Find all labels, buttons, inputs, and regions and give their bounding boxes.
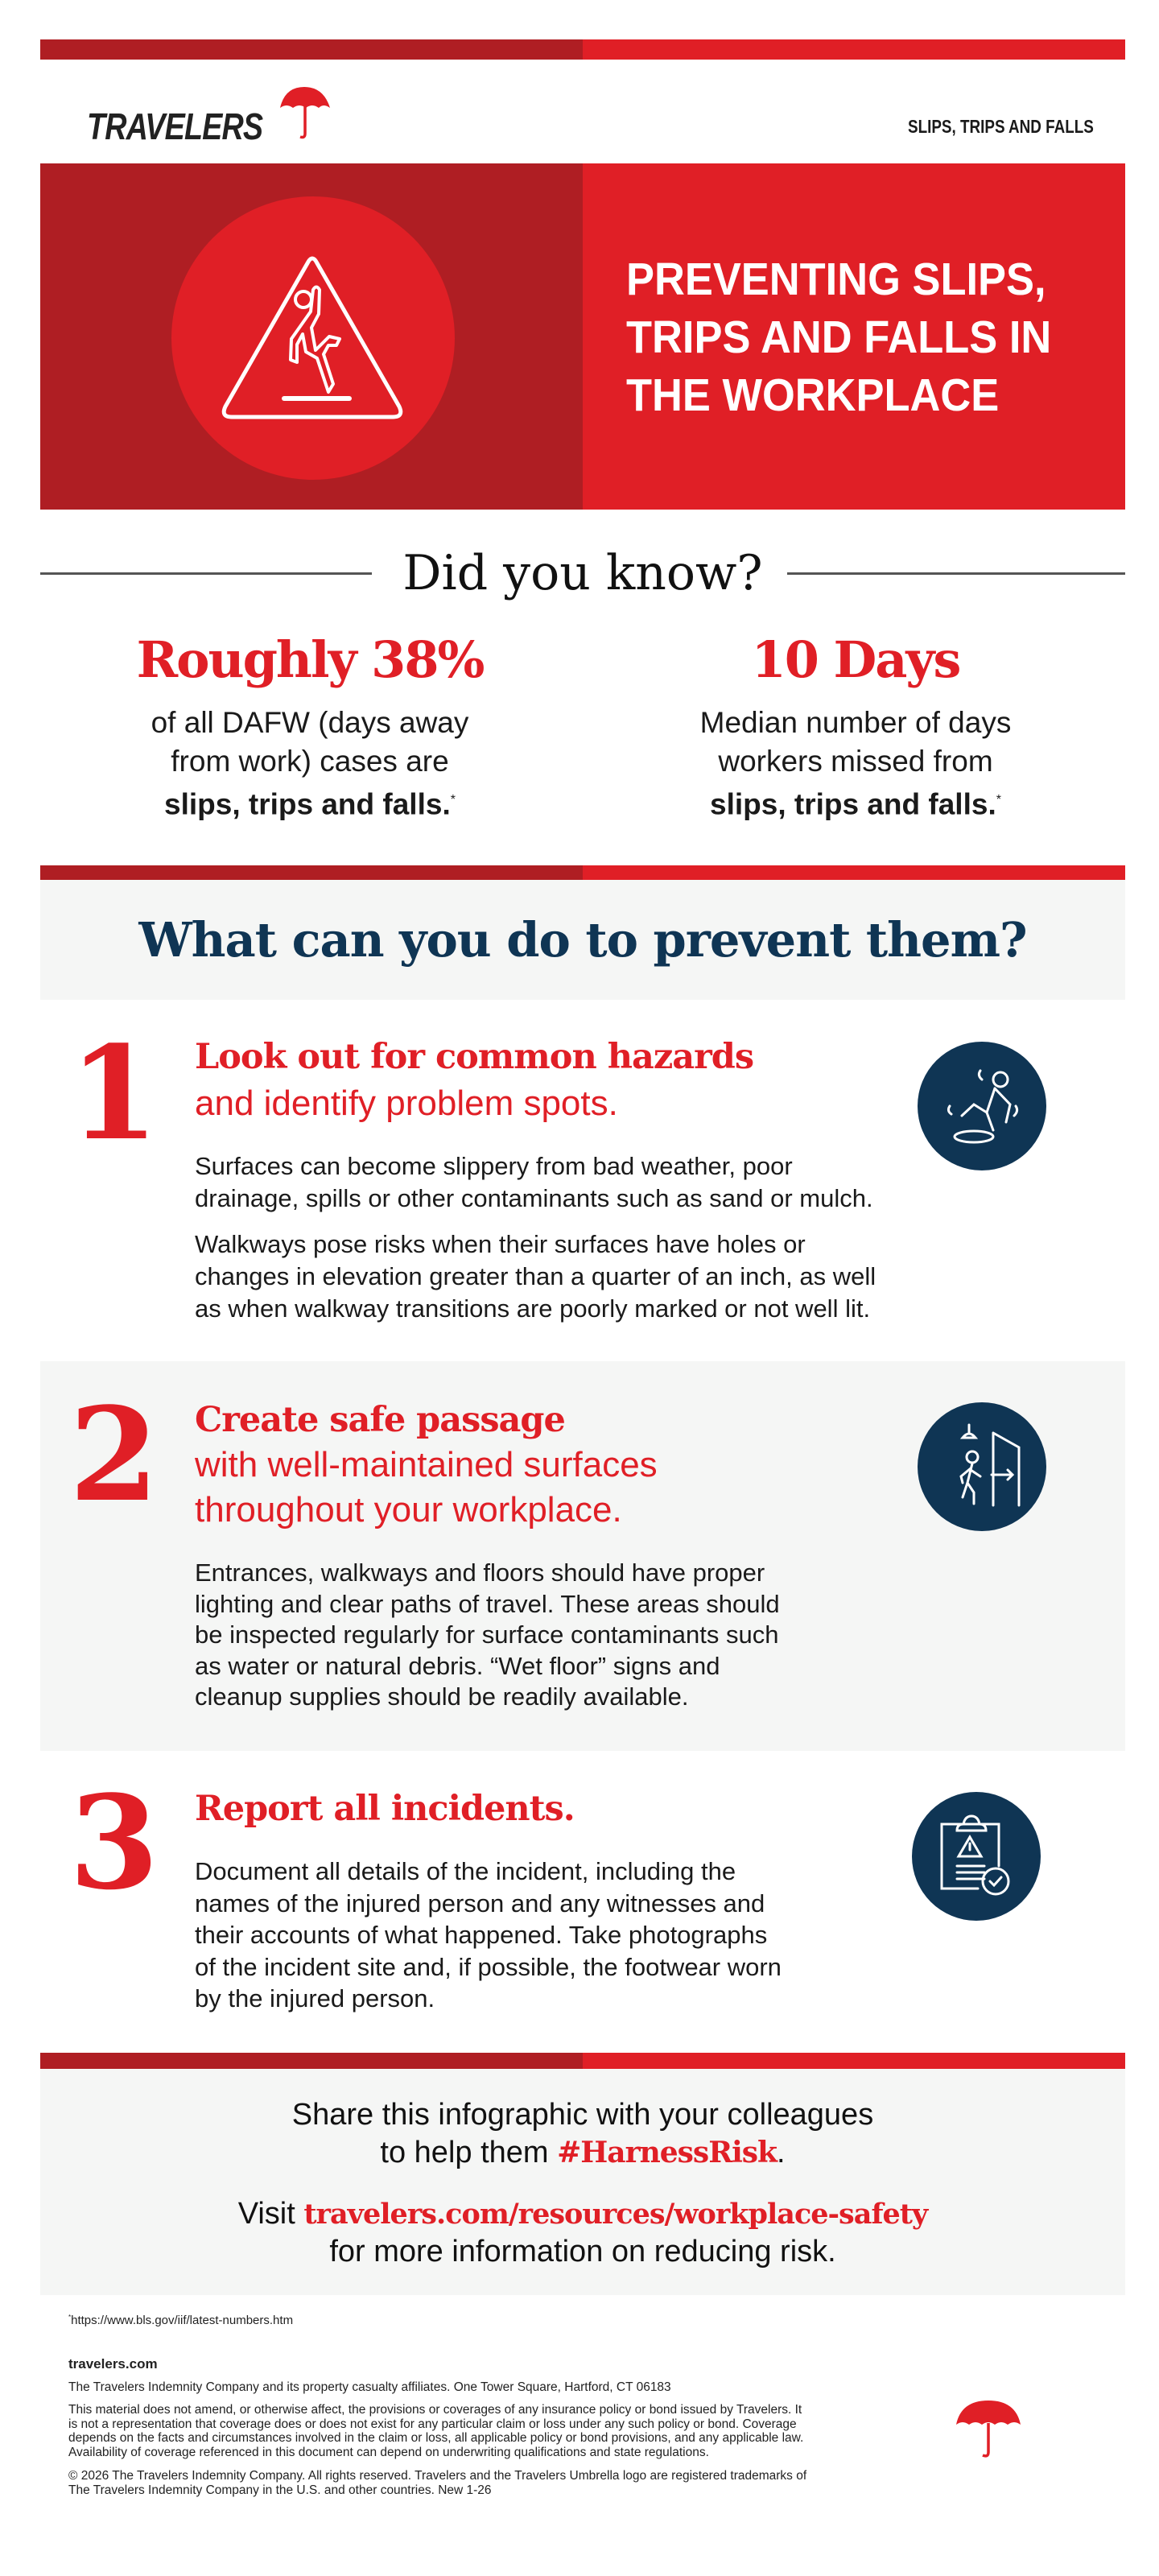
stat: 38%: slips, trips and falls.* bbox=[164, 787, 456, 820]
body 3: by the injured person. bbox=[195, 1984, 435, 2013]
body 2: lighting and clear paths of travel. These areas should bbox=[195, 1589, 780, 1618]
divider bar bbox=[40, 865, 1125, 880]
footer text bbox=[68, 2356, 806, 2497]
stat: 10 days: workers missed from bbox=[718, 745, 993, 778]
footer text: The Travelers Indemnity Company in the U.S. and other countries. New 1-26 bbox=[68, 2483, 492, 2497]
body 3 bbox=[195, 1857, 782, 2013]
body 3: names of the injured person and any witnesses and bbox=[195, 1889, 765, 1918]
heading 1: Look out for common hazards bbox=[195, 1037, 753, 1077]
body 1 bbox=[195, 1152, 876, 1323]
item 2 panel bbox=[40, 1361, 1125, 1751]
heading 2: throughout your workplace. bbox=[195, 1490, 622, 1530]
share callout: Visit travelers.com/resources/workplace-safety bbox=[238, 2197, 927, 2231]
hero title: PREVENTING SLIPS, bbox=[626, 254, 1046, 305]
body 2: cleanup supplies should be readily available. bbox=[195, 1682, 689, 1711]
stat: 10 days bbox=[700, 630, 1011, 820]
number 2: 2 bbox=[69, 1379, 159, 1530]
top color bar bbox=[40, 39, 1125, 60]
section heading: What can you do to prevent them? bbox=[138, 912, 1027, 968]
heading: did you know bbox=[40, 545, 1125, 601]
body 2: be inspected regularly for surface contaminants such bbox=[195, 1620, 778, 1649]
logo: Travelers bbox=[87, 87, 330, 147]
heading 2: with well-maintained surfaces bbox=[195, 1445, 658, 1484]
body 3: their accounts of what happened. Take photographs bbox=[195, 1921, 767, 1949]
hero title bbox=[626, 254, 1051, 421]
body 2: as water or natural debris. “Wet floor” signs and bbox=[195, 1652, 720, 1679]
icon: umbrella logo bbox=[956, 2401, 1021, 2458]
stat: 38%: from work) cases are bbox=[171, 745, 449, 778]
body 2: Entrances, walkways and floors should have proper bbox=[195, 1558, 765, 1587]
body 2 bbox=[195, 1558, 780, 1711]
body 1: changes in elevation greater than a quarter of an inch, as well bbox=[195, 1262, 876, 1290]
logo: Travelers: TRAVELERS bbox=[87, 105, 262, 147]
footer text: © 2026 The Travelers Indemnity Company. All rights reserved. Travelers and the Travelers Umbrella logo are registered trademarks of bbox=[68, 2469, 806, 2483]
stat: 10 days: 10 Days bbox=[752, 630, 959, 689]
footer text: This material does not amend, or otherwise affect, the provisions or coverages of any insurance policy or bond issued by Travelers. It bbox=[68, 2403, 802, 2417]
stat: 10 days: Median number of days bbox=[700, 706, 1011, 739]
footer text: travelers.com bbox=[68, 2356, 158, 2372]
stat: 38%: of all DAFW (days away bbox=[151, 706, 468, 739]
share callout: Share this infographic with your colleagues bbox=[292, 2098, 873, 2132]
body 3: of the incident site and, if possible, the footwear worn bbox=[195, 1953, 782, 1980]
footer text: The Travelers Indemnity Company and its property casualty affiliates. One Tower Square, Hartford, CT 06183 bbox=[68, 2380, 671, 2394]
share callout: to help them #HarnessRisk. bbox=[380, 2136, 786, 2169]
body 3: Document all details of the incident, including the bbox=[195, 1857, 736, 1885]
hero panel bbox=[40, 163, 1125, 510]
number 1: 1 bbox=[69, 1018, 159, 1169]
stat: 38%: Roughly 38% bbox=[137, 630, 483, 689]
share callout bbox=[40, 2069, 1125, 2295]
footnote: *https://www.bls.gov/iif/latest-numbers.htm bbox=[68, 2314, 293, 2327]
stat: 38% bbox=[137, 630, 484, 820]
stat: 10 days: slips, trips and falls.* bbox=[710, 787, 1001, 820]
item 3 bbox=[69, 1767, 1041, 2013]
heading: did you know: Did you know? bbox=[402, 545, 763, 601]
heading 2 bbox=[195, 1400, 658, 1530]
heading 2: Create safe passage bbox=[195, 1400, 565, 1440]
heading 3: Report all incidents. bbox=[195, 1789, 575, 1829]
item 1 bbox=[69, 1018, 1046, 1323]
icon: wet floor warning bbox=[171, 196, 455, 480]
icon: exit door bbox=[918, 1402, 1046, 1531]
icon: slipping person bbox=[918, 1042, 1046, 1170]
number 3: 3 bbox=[69, 1767, 159, 1918]
body 1: as when walkway transitions are poorly marked or not well lit. bbox=[195, 1294, 870, 1323]
footer text: is not a representation that coverage does or does not exist for any particular claim or loss under any such policy or bond. Coverage bbox=[68, 2417, 797, 2431]
footer text: Availability of coverage referenced in this document can depend on underwriting qualifications and state regulations. bbox=[68, 2446, 709, 2458]
heading 1: and identify problem spots. bbox=[195, 1084, 618, 1123]
body 1: drainage, spills or other contaminants such as sand or mulch. Walkways pose risks when their surfaces have holes or bbox=[195, 1184, 873, 1258]
body 1: Surfaces can become slippery from bad weather, poor bbox=[195, 1152, 793, 1180]
hero title: TRIPS AND FALLS IN bbox=[626, 312, 1051, 363]
header label: SLIPS, TRIPS AND FALLS bbox=[908, 116, 1094, 137]
share callout: for more information on reducing risk. bbox=[329, 2235, 836, 2268]
heading 1 bbox=[195, 1037, 753, 1123]
icon: clipboard report bbox=[912, 1792, 1041, 1921]
section heading bbox=[40, 880, 1125, 1000]
hero title: THE WORKPLACE bbox=[626, 369, 999, 421]
divider bar bbox=[40, 2053, 1125, 2069]
footer text: depends on the facts and circumstances involved in the claim or loss, all applicable policy or bond provisions, and any applicable law. bbox=[68, 2431, 803, 2445]
